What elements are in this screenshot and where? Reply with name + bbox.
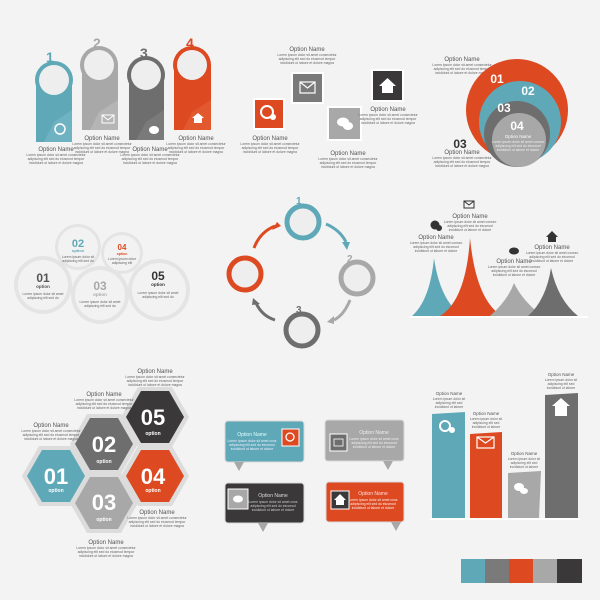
panel: peaks chart: Option Name	[418, 235, 454, 241]
panel: hexagons	[21, 369, 189, 558]
panel: hexagons: option	[96, 459, 112, 465]
bubble gray: adipiscing elit sed do eiusmod	[351, 441, 397, 445]
bubble gray	[325, 420, 404, 470]
square chat: Option Name	[330, 151, 366, 157]
panel: bubbles circles	[14, 224, 190, 324]
panel: bubbles circles: Lorem ipsum dolor sit	[62, 255, 94, 259]
panel: peaks chart: adipiscing elit sed do eiusmod	[413, 245, 459, 249]
panel: peaks chart: adipiscing elit sed do eiusmod	[529, 255, 575, 259]
panel: cycle	[229, 196, 373, 346]
panel: hexagons: adipiscing elit sed do eiusmod tempor	[127, 379, 184, 383]
panel: bar chart: incididunt ut labore	[435, 405, 463, 409]
panel: hexagons: option	[48, 488, 64, 494]
panel: hexagons: Option Name	[88, 540, 124, 546]
panel: bar chart: Option Name	[436, 391, 463, 396]
tab 4 orange: incididunt ut labore et dolore magna	[169, 150, 223, 154]
panel: concentric circles: 03	[497, 101, 511, 115]
panel: peaks chart: incididunt ut labore et dolore	[493, 273, 535, 277]
square mail: incididunt ut labore et dolore magna	[280, 61, 334, 65]
bubble teal: adipiscing elit sed do eiusmod	[229, 443, 275, 447]
bubble dark: incididunt ut labore et dolore	[252, 508, 294, 512]
panel: hexagons: 03	[92, 490, 116, 515]
square mail: Option Name	[289, 47, 325, 53]
panel: bubbles circles: option	[151, 282, 165, 287]
panel: bubbles circles: 02	[72, 238, 84, 250]
panel: bubbles circles: option	[117, 252, 127, 256]
panel: hexagons: 04	[141, 464, 166, 489]
panel: bar chart: Lorem ipsum dolor sit	[470, 417, 502, 421]
panel: peaks chart: Lorem ipsum dolor sit amet consec	[410, 241, 463, 245]
panel: cycle: 3	[296, 305, 302, 316]
square orange gear: Option Name	[252, 136, 288, 142]
panel: concentric circles: adipiscing elit sed do eiusmod tempor	[434, 160, 491, 164]
panel: hexagons: adipiscing elit sed do eiusmod tempor	[23, 433, 80, 437]
panel: peaks chart: incididunt ut labore et dolore	[449, 228, 491, 232]
bubble orange: Option Name	[358, 491, 388, 497]
bubble dark: Option Name	[258, 493, 288, 499]
panel: bar chart: Lorem ipsum dolor sit	[433, 397, 465, 401]
panel: hexagons: Lorem ipsum dolor sit amet consectetur	[21, 429, 82, 433]
bubble dark: Lorem ipsum dolor sit amet cons	[248, 500, 298, 504]
colour palette	[461, 559, 582, 583]
panel: concentric circles: Lorem ipsum dolor sit amet consectetur	[432, 156, 493, 160]
panel: hexagons: incididunt ut labore et dolore magna	[79, 554, 133, 558]
tab 1 teal: Option Name	[38, 147, 74, 153]
panel: peaks chart: adipiscing elit sed do eiusmod	[491, 269, 537, 273]
panel: hexagons: 05	[141, 405, 165, 430]
panel: hexagons: 01	[44, 464, 68, 489]
panel: peaks chart: incididunt ut labore et dolore	[415, 249, 457, 253]
square mail: adipiscing elit sed do eiusmod tempor	[279, 57, 336, 61]
panel: vertical tabs	[26, 35, 227, 165]
panel: bubbles circles: 05	[151, 269, 165, 283]
panel: hexagons: option	[96, 517, 112, 523]
tab 3 dark gray: Lorem ipsum dolor sit amet consectetur	[120, 153, 181, 157]
tab 2 light gray: Option Name	[84, 136, 120, 142]
panel: hexagons: 02	[92, 432, 116, 457]
panel: hexagons: incididunt ut labore et dolore magna	[128, 383, 182, 387]
panel: bubbles circles: Lorem ipsum dolor	[108, 257, 137, 261]
square orange gear	[240, 98, 301, 154]
panel: peaks chart	[410, 201, 588, 318]
panel: hexagons: Lorem ipsum dolor sit amet consectetur	[125, 375, 186, 379]
square orange gear: incididunt ut labore et dolore magna	[243, 150, 297, 154]
tab 3 dark gray: adipiscing elit sed do eiusmod tempor	[122, 157, 179, 161]
panel: peaks chart: adipiscing elit sed do eiusmod	[447, 224, 493, 228]
panel: concentric circles: Lorem ipsum dolor sit amet consec	[492, 140, 545, 144]
bubble orange	[326, 482, 404, 531]
tab 1 teal: Lorem ipsum dolor sit amet consectetur	[26, 153, 87, 157]
panel: bubbles circles: Lorem ipsum dolor sit amet	[23, 292, 63, 296]
panel: speech bubbles	[225, 420, 404, 532]
square mail: Lorem ipsum dolor sit amet consectetur	[277, 53, 338, 57]
tab 1 teal: adipiscing elit sed do eiusmod tempor	[28, 157, 85, 161]
panel: hexagons: Option Name	[139, 510, 175, 516]
square mail	[277, 47, 338, 104]
panel: concentric circles: incididunt ut labore et dolore	[497, 148, 539, 152]
tab 3 dark gray: Option Name	[132, 147, 168, 153]
panel: bar chart: Lorem ipsum dolor sit	[508, 457, 540, 461]
panel: bubbles circles: Lorem ipsum dolor sit amet	[80, 300, 120, 304]
panel: bubbles circles: adipiscing elit sed do	[62, 259, 94, 263]
panel: bubbles circles: adipiscing elit sed do	[142, 295, 174, 299]
panel: bubbles circles: option	[93, 292, 107, 297]
tab 4 orange: adipiscing elit sed do eiusmod tempor	[168, 146, 225, 150]
panel: bubbles circles: adipiscing elit sed do	[27, 296, 59, 300]
bubble gray: Lorem ipsum dolor sit amet cons	[350, 437, 399, 441]
square chat: incididunt ut labore et dolore magna	[321, 165, 375, 169]
panel: bar chart: Option Name	[511, 451, 538, 456]
panel: hexagons: adipiscing elit sed do eiusmod tempor	[76, 402, 133, 406]
panel: hexagons: Option Name	[137, 369, 173, 375]
panel: hexagons: Lorem ipsum dolor sit amet consectetur	[127, 516, 188, 520]
bubble gray: Option Name	[359, 430, 389, 436]
square chat	[318, 106, 379, 169]
panel: concentric circles	[432, 57, 568, 168]
panel: concentric circles: 01	[490, 72, 504, 86]
panel: concentric circles: incididunt ut labore et dolore magna	[435, 164, 489, 168]
panel: concentric circles: Option Name	[505, 134, 532, 139]
bubble orange: adipiscing elit sed do eiusmod	[350, 502, 396, 506]
panel: icon squares	[240, 47, 419, 169]
bubble gray: incididunt ut labore et dolore	[353, 445, 395, 449]
panel: hexagons: Option Name	[86, 392, 122, 398]
panel: hexagons: option	[145, 431, 161, 437]
tab 1 teal	[26, 49, 87, 165]
tab 2 light gray: incididunt ut labore et dolore magna	[75, 150, 129, 154]
bubble dark	[225, 483, 304, 532]
tab 2 light gray: adipiscing elit sed do eiusmod tempor	[74, 146, 131, 150]
panel: hexagons: incididunt ut labore et dolore magna	[130, 524, 184, 528]
panel: hexagons: option	[145, 488, 161, 494]
panel: concentric circles: Option Name	[444, 57, 480, 63]
tab 3 dark gray: incididunt ut labore et dolore magna	[123, 161, 177, 165]
panel: concentric circles: Option Name	[444, 150, 480, 156]
bubble teal: Lorem ipsum dolor sit amet cons	[228, 439, 277, 443]
panel: bar chart: Option Name	[548, 372, 575, 377]
panel: hexagons: Option Name	[33, 423, 69, 429]
tab 4 orange: 4	[186, 35, 194, 51]
square orange gear: adipiscing elit sed do eiusmod tempor	[242, 146, 299, 150]
panel: concentric circles: 03	[453, 137, 467, 151]
panel: peaks chart: Lorem ipsum dolor sit amet consec	[488, 265, 541, 269]
panel: peaks chart: Lorem ipsum dolor sit amet consec	[526, 251, 579, 255]
tab 3 dark gray	[120, 45, 181, 165]
panel: peaks chart: Option Name	[534, 245, 570, 251]
panel: bar chart: adipiscing elit sed	[548, 382, 574, 386]
square home: incididunt ut labore et dolore magna	[361, 121, 415, 125]
panel: peaks chart: Option Name	[496, 259, 532, 265]
panel: bubbles circles: adipiscing elit	[112, 261, 132, 265]
panel: concentric circles: 02	[521, 84, 535, 98]
bubble orange: incididunt ut labore et dolore	[352, 506, 394, 510]
bubble dark: adipiscing elit sed do eiusmod	[250, 504, 296, 508]
panel: bar chart: adipiscing elit sed	[436, 401, 462, 405]
panel: bar chart: adipiscing elit sed	[511, 461, 537, 465]
panel: bar chart: Option Name	[473, 411, 500, 416]
panel: hexagons: incididunt ut labore et dolore magna	[77, 406, 131, 410]
panel: bubbles circles: 04	[118, 243, 127, 252]
tab 2 light gray: Lorem ipsum dolor sit amet consectetur	[72, 142, 133, 146]
panel: bubbles circles: Lorem ipsum dolor sit amet	[138, 291, 178, 295]
panel: peaks chart: Option Name	[452, 214, 488, 220]
square home: adipiscing elit sed do eiusmod tempor	[360, 117, 417, 121]
bubble orange: Lorem ipsum dolor sit amet cons	[348, 498, 398, 502]
panel: concentric circles: 04	[510, 119, 524, 133]
tab 1 teal: incididunt ut labore et dolore magna	[29, 161, 83, 165]
panel: bar chart: incididunt ut labore	[510, 465, 538, 469]
tab 1 teal: 1	[46, 49, 54, 65]
panel: concentric circles: adipiscing elit sed do eiusmod tempor	[434, 67, 491, 71]
panel: bubbles circles: option	[36, 284, 50, 289]
panel: cycle: 2	[347, 254, 353, 265]
panel: concentric circles: incididunt ut labore et dolore magna	[435, 71, 489, 75]
bubble teal	[225, 421, 304, 471]
square home: Lorem ipsum dolor sit amet consectetur	[358, 113, 419, 117]
square home: Option Name	[370, 107, 406, 113]
panel: bubbles circles: adipiscing elit sed do	[84, 304, 116, 308]
tab 3 dark gray: 3	[140, 45, 148, 61]
panel: bubbles circles: 03	[93, 279, 107, 293]
bubble teal: incididunt ut labore et dolore	[231, 447, 273, 451]
tab 2 light gray	[72, 35, 133, 154]
panel: bar chart: incididunt ut labore	[472, 425, 500, 429]
panel: bar chart: incididunt ut labore	[547, 386, 575, 390]
panel: bubbles circles: option	[72, 248, 85, 253]
bubble teal: Option Name	[237, 432, 267, 438]
panel: hexagons: adipiscing elit sed do eiusmod tempor	[129, 520, 186, 524]
square chat: adipiscing elit sed do eiusmod tempor	[320, 161, 377, 165]
panel: bar chart	[430, 372, 580, 520]
tab 4 orange: Lorem ipsum dolor sit amet consectetur	[166, 142, 227, 146]
panel: peaks chart: incididunt ut labore et dolore	[531, 259, 573, 263]
square home	[358, 69, 419, 125]
panel: concentric circles: Lorem ipsum dolor sit amet consectetur	[432, 63, 493, 67]
tab 4 orange	[166, 35, 227, 154]
square orange gear: Lorem ipsum dolor sit amet consectetur	[240, 142, 301, 146]
panel: hexagons: Lorem ipsum dolor sit amet consectetur	[74, 398, 135, 402]
panel: bar chart: adipiscing elit sed	[473, 421, 499, 425]
panel: hexagons: incididunt ut labore et dolore magna	[24, 437, 78, 441]
panel: peaks chart: Lorem ipsum dolor sit amet consec	[444, 220, 497, 224]
tab 4 orange: Option Name	[178, 136, 214, 142]
panel: hexagons: Lorem ipsum dolor sit amet consectetur	[76, 546, 137, 550]
panel: bar chart: Lorem ipsum dolor sit	[545, 378, 577, 382]
panel: cycle: 1	[296, 196, 302, 207]
panel: bubbles circles: 01	[36, 271, 50, 285]
panel: concentric circles: adipiscing elit sed do eiusmod	[495, 144, 541, 148]
square chat: Lorem ipsum dolor sit amet consectetur	[318, 157, 379, 161]
panel: hexagons: adipiscing elit sed do eiusmod tempor	[78, 550, 135, 554]
tab 2 light gray: 2	[93, 35, 101, 51]
